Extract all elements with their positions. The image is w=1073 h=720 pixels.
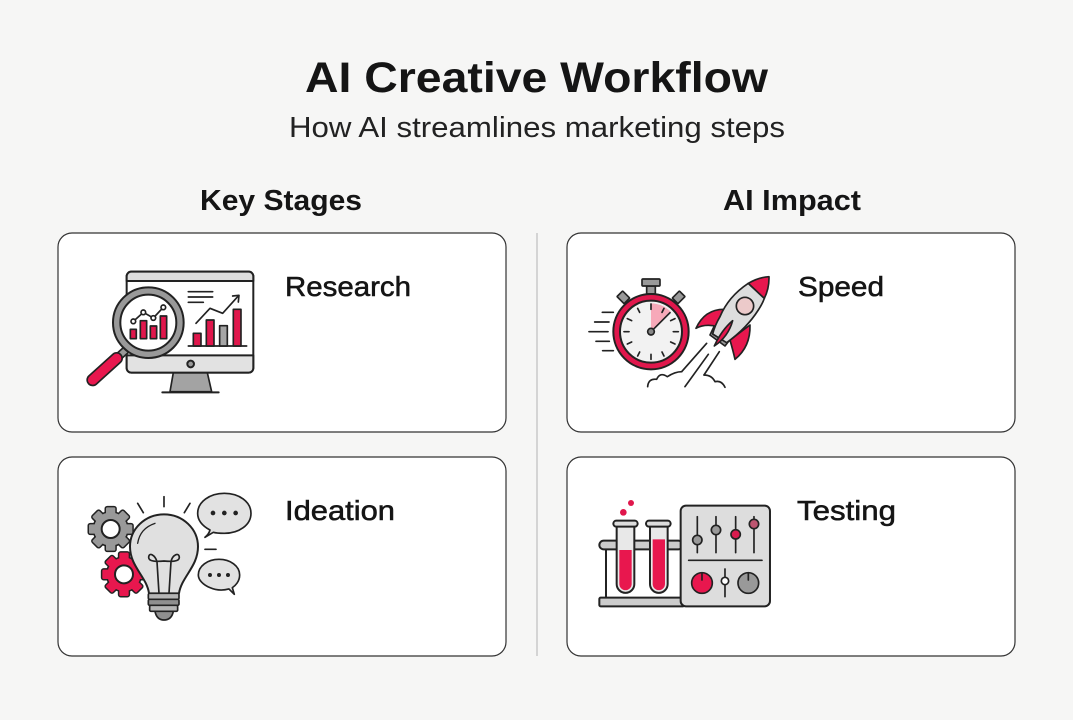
label: Speed: Speed [798,271,884,302]
subtitle: How AI streamlines marketing steps [289,112,785,144]
label: Testing: Testing [797,495,896,526]
panel: Speed [567,233,1015,432]
icon: monitor with magnifier and charts [93,272,253,392]
heading: Key Stages: Key Stages [200,185,362,217]
label: Ideation: Ideation [285,495,395,526]
panel: Research [58,233,506,432]
heading: AI Impact: AI Impact [723,185,861,217]
icon: test tubes and control panel [599,500,770,606]
panel: Ideation [58,457,506,656]
label: Research: Research [285,271,411,302]
icon: stopwatch and rocket [589,277,769,387]
icon: light bulb, gears and speech bubbles [89,493,251,620]
panel: Testing [567,457,1015,656]
title: AI Creative Workflow [305,54,769,102]
